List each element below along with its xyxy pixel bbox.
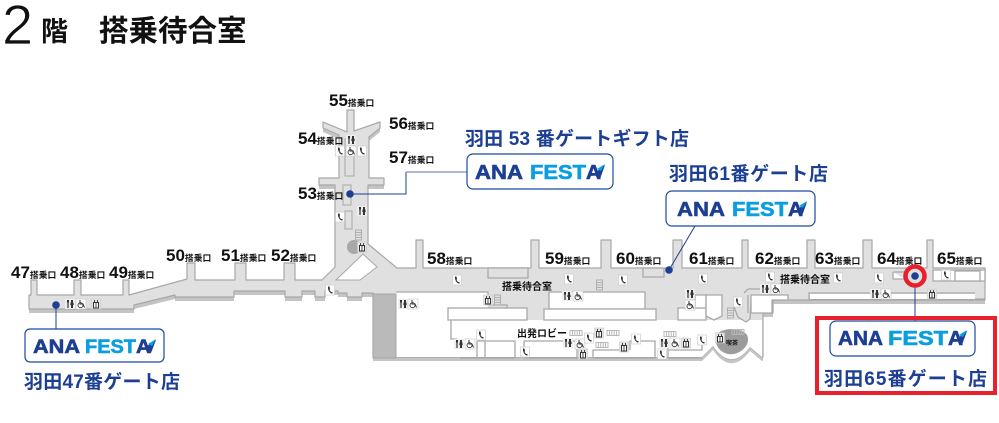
rotunda — [716, 329, 748, 354]
service labels — [502, 273, 830, 347]
gate labels — [11, 91, 982, 282]
callout: gate 53 store: ANA — [475, 162, 523, 184]
corridor counters — [336, 139, 377, 280]
gate labels: 53搭乗口 — [298, 184, 343, 203]
callout: gate 47 store: 羽田47番ゲート店 — [24, 371, 180, 393]
callout: gate 53 store: FEST — [530, 162, 586, 184]
callout: gate 61 store: FEST — [732, 199, 788, 221]
callout: gate 61 store: A — [788, 199, 803, 221]
gate labels: 64搭乗口 — [877, 249, 922, 268]
gate labels: 52搭乗口 — [271, 246, 316, 265]
gate labels: 47搭乗口 — [11, 263, 56, 282]
floor shadow — [29, 114, 985, 363]
callout: gate 65 store highlighted: 羽田65番ゲート店 — [824, 368, 987, 390]
floor map — [29, 110, 985, 363]
callout: gate 53 store: A — [586, 162, 601, 184]
title — [2, 0, 247, 56]
callout: gate 53 store — [346, 128, 689, 198]
callout: gate 61 store: 羽田61番ゲート店 — [669, 163, 828, 185]
gate labels: 55搭乗口 — [329, 91, 374, 110]
rooms — [396, 268, 985, 359]
gate labels: 61搭乗口 — [689, 249, 734, 268]
callout: gate 65 store highlighted — [817, 266, 995, 393]
floor plan — [29, 110, 985, 359]
gate labels: 56搭乗口 — [389, 114, 434, 133]
gate labels: 51搭乗口 — [221, 246, 266, 265]
service labels: 喫茶 — [726, 339, 738, 347]
callout: gate 47 store — [24, 301, 180, 393]
title: 搭乗待合室 — [99, 15, 247, 48]
gate labels: 57搭乗口 — [389, 148, 434, 167]
gate labels: 54搭乗口 — [298, 129, 343, 148]
gate labels: 50搭乗口 — [166, 246, 211, 265]
service labels: 出発ロビー — [517, 327, 567, 340]
callout: gate 61 store: ANA — [677, 199, 725, 221]
callout: gate 53 store: 羽田 53 番ゲートギフト店 — [465, 128, 689, 150]
callout: gate 47 store: A — [136, 337, 151, 358]
dark service block — [373, 294, 396, 358]
gate labels: 48搭乗口 — [60, 263, 105, 282]
gate labels: 58搭乗口 — [427, 249, 472, 268]
title: 階 — [41, 17, 68, 47]
callout: gate 65 store highlighted: ANA — [838, 328, 883, 350]
small round shaft — [347, 240, 361, 254]
gate labels: 65搭乗口 — [937, 249, 982, 268]
gate labels: 62搭乗口 — [755, 249, 800, 268]
icons — [65, 135, 950, 359]
gate labels: 59搭乗口 — [545, 249, 590, 268]
gate labels: 63搭乗口 — [815, 249, 860, 268]
service labels: 搭乗待合室 — [502, 280, 552, 293]
callout: gate 47 store: FEST — [85, 337, 136, 358]
callout: gate 65 store highlighted: A — [948, 328, 963, 350]
service labels: 搭乗待合室 — [780, 273, 830, 286]
gate labels: 60搭乗口 — [616, 249, 661, 268]
gate labels: 49搭乗口 — [109, 263, 154, 282]
callout: gate 61 store — [665, 163, 828, 274]
callout: gate 47 store: ANA — [33, 337, 80, 358]
callout: gate 65 store highlighted: FEST — [888, 328, 948, 350]
